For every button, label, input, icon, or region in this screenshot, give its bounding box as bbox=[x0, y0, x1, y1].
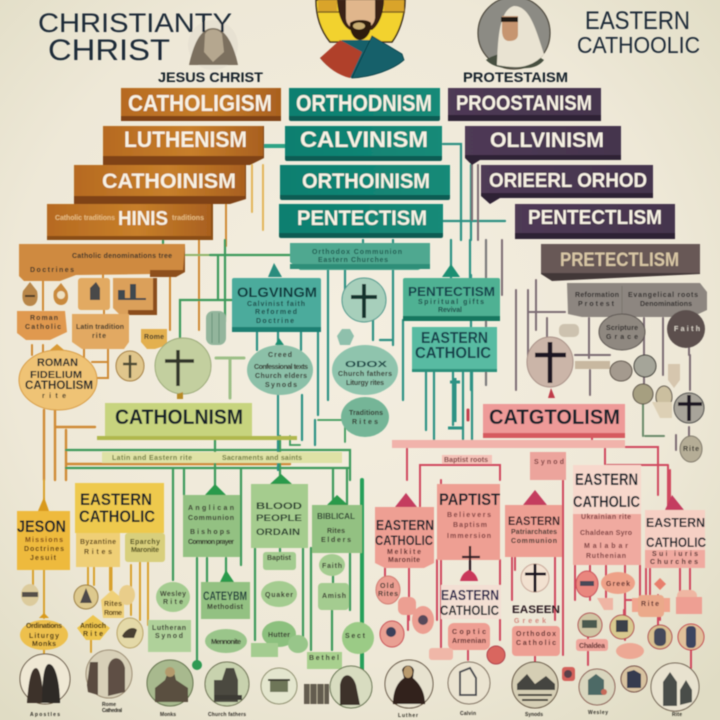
band: grey text block bbox=[567, 283, 707, 317]
box: Eastern Catholic pink one: Maronite bbox=[388, 557, 420, 564]
teal upper band: Eastern Churches bbox=[318, 257, 388, 264]
ellipse: green edge: Sect bbox=[345, 633, 366, 640]
title: Christianity Christ bbox=[38, 8, 232, 67]
icon: yellow pendant bbox=[119, 585, 135, 605]
box: green one: Anglican bbox=[188, 505, 234, 512]
box: Cateybm bbox=[201, 570, 250, 619]
box: Eastern Catholic pink four: Ukrainian rite bbox=[581, 514, 631, 521]
bar: Pretectlism bbox=[541, 244, 700, 281]
ellipse: green left: Rite bbox=[163, 599, 183, 606]
ellipse: green edge bbox=[342, 622, 374, 654]
bar: Cathoinism: CATHOINISM bbox=[102, 170, 236, 193]
ellipse: Roman Catholism: CATHOLISM bbox=[25, 378, 93, 392]
box: Eastern Catholic teal bbox=[412, 327, 497, 372]
box: green two: ORDAIN bbox=[256, 527, 300, 537]
box: Olgvingm: Doctrine bbox=[256, 318, 294, 325]
icon: green dot bbox=[192, 660, 202, 670]
box: Eastern Catholic pink one: EASTERN bbox=[376, 517, 434, 534]
ellipse: yellow notes left: Liturgy bbox=[29, 633, 59, 640]
ellipse: green note center bbox=[262, 621, 308, 653]
bar: Luthenism: LUTHENISM bbox=[124, 127, 247, 152]
block: text left: Roman bbox=[30, 315, 58, 322]
ellipse: Roman Catholism bbox=[19, 344, 97, 410]
ellipse: yellow notes left: Ordinations bbox=[26, 623, 62, 630]
purple tier bars bbox=[448, 88, 700, 281]
bottom captions: Church fathers bbox=[208, 712, 246, 718]
circle: figure pink bbox=[579, 669, 615, 705]
band: grey text block: Reformation bbox=[575, 292, 619, 299]
box: green note left: Synod bbox=[155, 633, 183, 640]
ellipse: yellow notes middle: Rite bbox=[83, 631, 103, 638]
block: text middle: Latin tradition bbox=[76, 324, 124, 331]
box: Eastern pink three: EASTERN bbox=[508, 514, 560, 528]
ellipse: Roman Catholism: rite bbox=[42, 393, 66, 400]
circle: green monk bbox=[147, 660, 193, 706]
green sub-diagram bbox=[148, 474, 374, 670]
block: green right: Amish bbox=[322, 593, 346, 600]
bar: Calvinism: CALVINISM bbox=[300, 127, 428, 152]
box: Jeson: JESON bbox=[17, 517, 66, 536]
circle: red small medal bbox=[562, 667, 575, 681]
box: green three: BIBLICAL bbox=[317, 512, 355, 521]
box: Eastern Catholic pink five bbox=[645, 495, 706, 568]
block: text middle: rite bbox=[92, 333, 106, 340]
box: green two: PEOPLE bbox=[256, 513, 302, 523]
band: pink under label bbox=[392, 440, 625, 480]
box: Olgvingm: Reformed bbox=[255, 309, 297, 316]
bar: Calvinism bbox=[285, 126, 442, 161]
tag: green low right bbox=[307, 652, 342, 669]
box: Eastern Catholic yellow bbox=[75, 483, 164, 533]
box: Eastern Catholic yellow: CATHOLIC bbox=[79, 507, 155, 526]
pink sub-diagram bbox=[375, 465, 706, 664]
bottom captions: Wesley bbox=[588, 710, 608, 716]
bottom captions: Synods bbox=[525, 712, 543, 718]
block: yellow diamond: Rome bbox=[104, 610, 122, 617]
bar: Orthodnism: ORTHODNISM bbox=[296, 90, 432, 116]
box: Eastern Catholic pink four: EASTERN bbox=[575, 470, 638, 489]
label: Protestaism: PROTESTAISM bbox=[463, 69, 568, 85]
box: Eastern Catholic pink one bbox=[375, 493, 434, 568]
bar: Pretectlism: PRETECTLISM bbox=[560, 250, 679, 271]
box: Catgtolism bbox=[483, 404, 625, 438]
block: yellow sub left bbox=[76, 533, 120, 567]
box: Eastern Catholic pink four: Chaldean Syro bbox=[580, 530, 632, 537]
ellipse: center notes: Liturgy rites bbox=[346, 380, 384, 387]
icon: bird circle bbox=[117, 618, 143, 648]
text: Eastern Catholic middle: CATHOLIC bbox=[440, 602, 499, 618]
block: yellow diamond bbox=[101, 590, 124, 618]
block: yellow sub right bbox=[125, 533, 165, 562]
box: Eastern Catholic pink five: Churches bbox=[650, 559, 698, 566]
text: Easeen: EASEEN bbox=[512, 604, 560, 616]
box: Eastern Catholic pink four bbox=[573, 465, 641, 565]
bottom captions bbox=[30, 702, 682, 719]
title: Eastern Catholic: EASTERN bbox=[585, 7, 690, 35]
box: Jeson: Doctrines bbox=[24, 546, 64, 553]
box: Eastern pink three: Patriarchates bbox=[511, 529, 557, 536]
box: Pentectism: Spiritual gifts bbox=[418, 299, 484, 306]
circle: dark grey bbox=[667, 310, 705, 348]
box: Pentectism bbox=[403, 264, 500, 321]
orange tier bars bbox=[47, 88, 281, 240]
box: Pentectism: Revival bbox=[438, 307, 462, 314]
yellow connector lines bbox=[33, 480, 148, 655]
circle: center small bbox=[341, 397, 389, 437]
ellipse: green small: Faith bbox=[322, 563, 342, 570]
icon: veiled figure bbox=[478, 0, 550, 69]
box: Paptist: Believers bbox=[447, 512, 491, 519]
block: green sub: Baptist bbox=[267, 555, 292, 562]
box: Eastern Catholic pink five: Sui iuris bbox=[652, 551, 698, 558]
box: green note left: Lutheran bbox=[152, 625, 186, 632]
box: Cateybm: Methodist bbox=[207, 604, 244, 611]
ellipse: grey notes: Scripture bbox=[606, 325, 638, 332]
box: Eastern Catholic teal: CATHOLIC bbox=[415, 345, 491, 362]
icon: cross circle right bbox=[674, 393, 704, 423]
box: green one: Common prayer bbox=[188, 539, 234, 546]
ellipse: Roman Catholism: ROMAN bbox=[37, 357, 78, 369]
band: pale under label: Sacraments and saints bbox=[222, 455, 302, 462]
box: Catgtolism: CATGTOLISM bbox=[489, 406, 620, 429]
box: Cateybm: CATEYBM bbox=[203, 589, 247, 603]
bar: Cathoinism bbox=[74, 165, 246, 204]
bottom captions: Apostles bbox=[30, 712, 60, 718]
block: yellow sub left: Rites bbox=[84, 549, 112, 556]
box: green one: Communion bbox=[188, 515, 234, 522]
bar: Orieerl Orhod: ORIEERL ORHOD bbox=[489, 170, 647, 192]
box: Eastern Catholic yellow: EASTERN bbox=[80, 490, 152, 509]
circle: figure at divider bbox=[330, 666, 372, 708]
box: Catholnism bbox=[97, 403, 297, 440]
box: Eastern Catholic pink one: Melkite bbox=[387, 549, 421, 556]
block: banner bbox=[19, 244, 185, 281]
block: text middle bbox=[72, 314, 129, 349]
pink ovals row bbox=[376, 571, 704, 664]
box: Eastern Catholic pink four: Malabar bbox=[584, 543, 628, 550]
yellow sub-diagram bbox=[17, 483, 165, 650]
box: Paptist bbox=[437, 484, 501, 560]
pink ovals row: Chaldea bbox=[579, 643, 605, 650]
box: Olgvingm: OLGVINGM bbox=[237, 284, 317, 300]
bar: Pentectism bbox=[279, 204, 443, 238]
ellipse: green left bbox=[156, 582, 190, 612]
box: Eastern Catholic pink five: CATHOLIC bbox=[646, 534, 706, 550]
ellipse: center notes: ODOX bbox=[345, 360, 388, 369]
grey-purple connector lines bbox=[472, 144, 690, 450]
icon: large cross circle bbox=[155, 338, 211, 399]
box: Jeson bbox=[17, 497, 70, 570]
block: text left: Catholic bbox=[25, 324, 61, 331]
ellipse: green left: Wesley bbox=[160, 591, 186, 598]
block: yellow sub right: Eparchy bbox=[130, 539, 160, 546]
box: pink below: Armenian bbox=[452, 638, 486, 645]
ellipse: Roman Catholism: FIDELIUM bbox=[30, 370, 82, 381]
box: pink lower bbox=[512, 626, 560, 656]
ellipse: grey notes: Grace bbox=[606, 334, 638, 341]
band: pale under label bbox=[102, 452, 342, 463]
title: Eastern Catholic bbox=[577, 7, 700, 58]
circle: center small: Rites bbox=[352, 419, 378, 426]
box: Olgvingm: Calvinist faith bbox=[247, 301, 305, 308]
box: Eastern pink three bbox=[505, 490, 562, 557]
ellipse: center notes bbox=[332, 345, 398, 395]
box: pink lower: Orthodox bbox=[516, 631, 556, 638]
band: grey text block: Evangelical roots bbox=[628, 292, 698, 299]
block: icon tower bbox=[113, 278, 157, 315]
icon: teal cross circle bbox=[342, 278, 386, 322]
box: Eastern Catholic pink four: CATHOLIC bbox=[573, 494, 640, 511]
bar: Proostanism bbox=[448, 88, 601, 121]
circle: grey lower right bbox=[680, 436, 702, 462]
circle: books bbox=[261, 668, 297, 704]
bar: Orthoinism bbox=[280, 165, 450, 200]
bottom captions: Rite bbox=[672, 712, 682, 718]
box: Eastern Catholic pink five: EASTERN bbox=[646, 515, 705, 530]
icon: small cross bbox=[460, 546, 480, 581]
box: pink below: Coptic bbox=[452, 629, 486, 636]
bottom captions: Cathedral bbox=[102, 708, 123, 714]
block: text left bbox=[17, 311, 67, 340]
box: Jeson: Missions bbox=[25, 537, 63, 544]
text: Eastern Catholic middle: EASTERN bbox=[441, 587, 499, 604]
green connector lines bbox=[66, 146, 362, 670]
pink ovals row: Old bbox=[380, 583, 394, 590]
block: banner: Catholic denominations tree bbox=[72, 253, 172, 260]
grey sub-diagram bbox=[527, 283, 707, 462]
tag: grey small bbox=[559, 324, 579, 337]
circle: grey lower right: Rite bbox=[683, 446, 699, 453]
icon: small cross ellipse bbox=[116, 351, 144, 381]
ellipse: yellow notes left bbox=[20, 613, 68, 650]
red connector lines bbox=[385, 410, 691, 668]
box: green two bbox=[251, 474, 308, 548]
ellipse: green note middle: Mennonite bbox=[211, 639, 241, 646]
box: green three: Elders bbox=[321, 537, 351, 544]
orange sub-diagram bbox=[17, 244, 211, 410]
label: Jesus Christ: JESUS CHRIST bbox=[158, 69, 263, 85]
icon: drop right bbox=[53, 283, 68, 305]
ellipse: teal notes: Confessional texts bbox=[254, 364, 308, 371]
ellipse: center notes: Church fathers bbox=[338, 371, 392, 378]
title: Christianity Christ: CHRISTIANTY bbox=[38, 8, 232, 38]
bar: Pentectlism bbox=[515, 204, 675, 239]
box: Eastern pink three: Communion bbox=[511, 538, 557, 545]
ellipse: green note middle bbox=[205, 629, 247, 653]
tag: green low right: Bethel bbox=[309, 655, 339, 662]
box: Pentectism: PENTECTISM bbox=[408, 284, 495, 299]
box: green one bbox=[183, 484, 240, 557]
box: pink lower: Catholic bbox=[516, 640, 556, 647]
ellipse: yellow notes middle bbox=[77, 615, 110, 640]
circle: two figures bbox=[20, 654, 70, 704]
circle: table scene bbox=[512, 662, 558, 708]
bottom captions: Rome bbox=[102, 702, 116, 708]
circle: dark grey: Faith bbox=[674, 326, 700, 333]
band: pale under label: Latin and Eastern rite bbox=[112, 455, 192, 462]
box: Paptist: Baptism bbox=[453, 522, 487, 529]
ellipse: yellow notes left: Monks bbox=[32, 641, 56, 648]
icon: Jesus portrait bbox=[316, 0, 405, 78]
icon: green lantern bbox=[206, 311, 226, 345]
box: Jeson: Jesuit bbox=[30, 555, 57, 562]
band: grey text block: Denominations bbox=[640, 301, 692, 308]
circle: dark medallion bbox=[621, 666, 647, 692]
icon: book block bbox=[304, 684, 329, 704]
box: Paptist: Immersion bbox=[447, 533, 491, 540]
block: yellow sub left: Byzantine bbox=[80, 539, 116, 546]
bar: Ollvinism bbox=[465, 126, 621, 165]
box: green three bbox=[312, 495, 362, 553]
teal tier bars bbox=[279, 88, 450, 238]
orange connector lines bbox=[32, 165, 290, 480]
ellipse: green small bbox=[319, 554, 345, 576]
bar: Hinis: traditions bbox=[172, 215, 204, 222]
band: pink under label: Synod bbox=[534, 459, 564, 466]
ellipse: teal notes: Synods bbox=[265, 382, 297, 389]
block: green sub bbox=[263, 552, 296, 570]
bar: Pentectlism: PENTECTLISM bbox=[528, 207, 662, 229]
icon: teal anchor bbox=[448, 378, 462, 428]
block: banner: Doctrines bbox=[30, 267, 74, 274]
teal upper band bbox=[290, 243, 430, 270]
ellipse: teal notes: Church elders bbox=[255, 373, 307, 380]
ellipse: green middle bbox=[261, 581, 297, 607]
icon: drop bbox=[21, 584, 39, 606]
text: Eastern Catholic middle bbox=[440, 585, 501, 619]
block: small tag bbox=[141, 329, 167, 349]
ellipse: green note center: Hutter bbox=[268, 632, 290, 639]
icon: robed figure bbox=[188, 20, 238, 70]
icon: small grey circles bbox=[610, 355, 680, 418]
pink ovals row: Rites bbox=[378, 591, 398, 598]
bar: Orieerl Orhod bbox=[481, 165, 653, 204]
tag: green low left bbox=[251, 643, 278, 657]
circle: two statues bbox=[651, 663, 699, 711]
block: icon church bbox=[78, 278, 110, 310]
ellipse: teal notes bbox=[247, 338, 313, 395]
box: green one: Bishops bbox=[190, 529, 230, 536]
teal upper band: Orthodox Communion bbox=[312, 249, 402, 256]
box: green three: Rites bbox=[327, 528, 345, 535]
ellipse: green middle: Quaker bbox=[265, 592, 293, 599]
box: Eastern Catholic pink four: Ruthenian bbox=[586, 553, 626, 560]
bar: Hinis: HINIS bbox=[118, 208, 168, 230]
ellipse: grey notes bbox=[599, 314, 645, 350]
block: yellow diamond: Rites bbox=[104, 601, 122, 608]
bottom portrait circles bbox=[20, 650, 699, 711]
box: Catholnism: CATHOLNISM bbox=[115, 406, 243, 429]
bottom captions: Monks bbox=[160, 712, 176, 718]
box: Eastern Catholic pink one: CATHOLIC bbox=[375, 532, 433, 548]
bottom captions: Calvin bbox=[460, 711, 476, 717]
bar: Pentectism: PENTECTISM bbox=[297, 207, 427, 230]
circle: dark robed figure bbox=[385, 660, 433, 708]
tag: grey bar bbox=[575, 361, 610, 369]
text: Easeen: Greek bbox=[514, 618, 546, 625]
text: Easeen bbox=[512, 604, 560, 625]
teal connector lines bbox=[257, 144, 505, 470]
band: grey text block: Protest bbox=[578, 301, 615, 308]
circle: cathedral bbox=[86, 650, 132, 698]
bar: Proostanism: PROOSTANISM bbox=[456, 92, 592, 115]
circle: statue bbox=[205, 662, 249, 706]
box: green two: BLOOD bbox=[256, 501, 303, 511]
box: Eastern Catholic teal: EASTERN bbox=[421, 330, 488, 347]
icon: drop left bbox=[22, 282, 38, 306]
block: yellow sub right: Maronite bbox=[131, 547, 159, 554]
bar: Hinis bbox=[47, 204, 213, 240]
ellipse: teal notes: Creed bbox=[268, 352, 292, 359]
bar: Orthoinism: ORTHOINISM bbox=[302, 170, 430, 193]
icon: large cross grey-pink bbox=[527, 337, 573, 398]
title: Eastern Catholic: CATHOOLIC bbox=[577, 32, 700, 58]
ellipse: yellow notes middle: Antioch bbox=[80, 623, 106, 630]
bar: Hinis: Catholic traditions bbox=[55, 215, 115, 222]
block: small tag: Rome bbox=[144, 334, 164, 341]
circle: center small: Traditions bbox=[349, 410, 383, 417]
block: green right bbox=[318, 583, 349, 610]
bar: Luthenism bbox=[103, 126, 264, 165]
icon: church circle bbox=[74, 585, 98, 609]
band: pink under label: Baptist roots bbox=[444, 457, 488, 464]
title: Christianity Christ: CHRIST bbox=[48, 34, 170, 67]
pink ovals row: Greek bbox=[606, 581, 630, 588]
pink ovals row: Rite bbox=[641, 601, 659, 608]
bottom captions: Luther bbox=[398, 713, 418, 719]
bar: Catholigism: CATHOLIGISM bbox=[128, 90, 272, 116]
box: green note left bbox=[148, 620, 191, 652]
icon: teal pin bbox=[337, 329, 354, 345]
box: Paptist: PAPTIST bbox=[439, 490, 501, 509]
icon: cross circle pink bbox=[521, 564, 549, 592]
box: pink below bbox=[448, 623, 490, 650]
box: Olgvingm bbox=[232, 263, 321, 332]
bar: Ollvinism: OLLVINISM bbox=[490, 129, 604, 152]
circle: figure sketch bbox=[448, 662, 490, 704]
